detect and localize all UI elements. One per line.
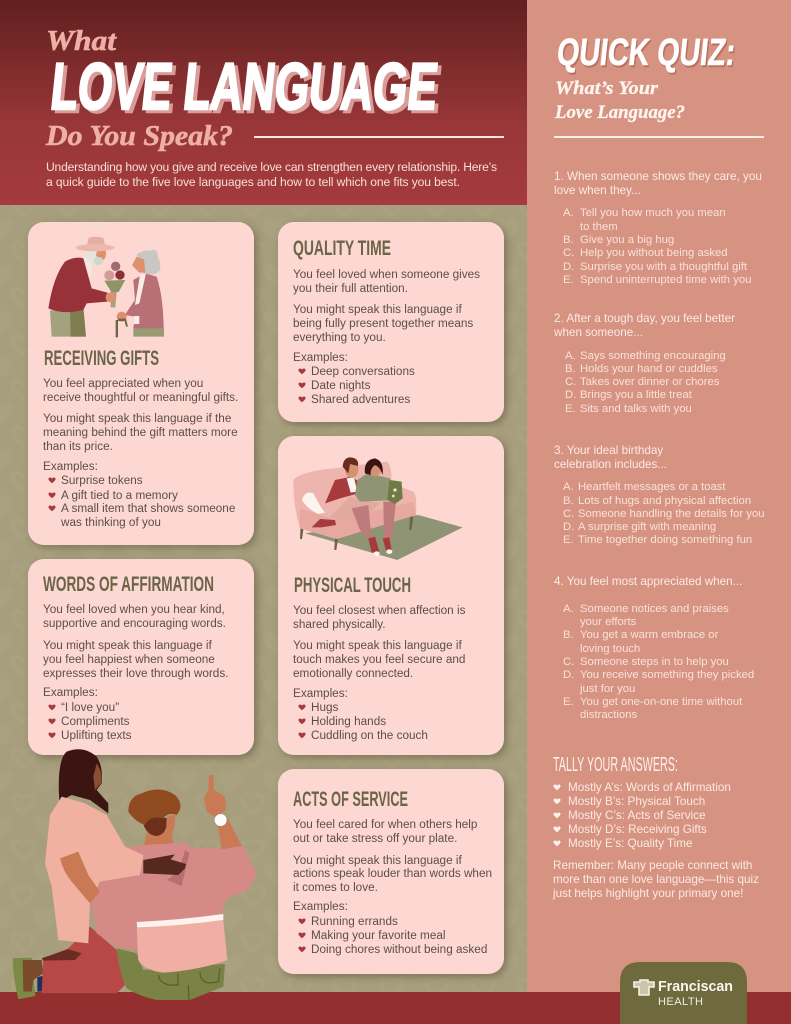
heading: words of affirmation: WORDS OF AFFIRMATION bbox=[43, 573, 214, 596]
question 3: Lots of hugs and physical affection bbox=[578, 495, 751, 507]
question 3 bbox=[554, 444, 765, 546]
question 2: C. bbox=[565, 376, 576, 388]
question 4: loving touch bbox=[580, 643, 640, 655]
text: receiving gifts: than its price. bbox=[43, 440, 113, 453]
question 1: Surprise you with a thoughtful gift bbox=[580, 261, 748, 273]
icon: elderly couple with flowers bbox=[48, 237, 164, 337]
text: physical touch: touch makes you feel secure and bbox=[293, 653, 465, 666]
title: Do You Speak: Do You Speak? bbox=[45, 120, 233, 152]
question 2 bbox=[553, 312, 735, 415]
title: Love Language: LOVE LANGUAGE bbox=[51, 53, 445, 127]
question 3: 3. Your ideal birthday bbox=[554, 444, 663, 457]
question 4: You receive something they picked bbox=[580, 669, 754, 681]
question 3: D. bbox=[563, 521, 574, 533]
text: receiving gifts: meaning behind the gift matters more bbox=[43, 426, 238, 439]
text: acts of service: actions speak louder than words when bbox=[293, 867, 492, 880]
text: acts of service: it comes to love. bbox=[293, 881, 378, 894]
remember note: just helps highlight your primary one! bbox=[552, 887, 743, 900]
footer bar bbox=[0, 992, 791, 1024]
question 3: A. bbox=[563, 481, 574, 493]
question 3: Time together doing something fun bbox=[578, 534, 752, 546]
quiz subheading: Love Language? bbox=[554, 102, 685, 123]
question 4 bbox=[554, 575, 754, 721]
question 2: E. bbox=[565, 403, 576, 415]
text: receiving gifts: Surprise tokens bbox=[61, 474, 143, 487]
text: physical touch: shared physically. bbox=[293, 618, 386, 631]
heading: acts of service: ACTS OF SERVICE bbox=[293, 788, 408, 811]
text: words of affirmation: “I love you” bbox=[61, 701, 119, 714]
logo: Franciscan Health: HEALTH bbox=[658, 996, 703, 1008]
panel: quiz sidebar bbox=[527, 0, 791, 1024]
text: acts of service bbox=[293, 818, 492, 956]
question 2: A. bbox=[565, 350, 576, 362]
question 1: Give you a big hug bbox=[580, 234, 674, 246]
text: acts of service: out or take stress off your plate. bbox=[293, 832, 457, 845]
intro text: Understanding how you give and receive love can strengthen every relationship. Here’s bbox=[46, 160, 497, 174]
question 1: Tell you how much you mean bbox=[580, 207, 726, 219]
question 4: A. bbox=[563, 603, 574, 615]
remember note bbox=[552, 859, 759, 900]
question 3: Someone handling the details for you bbox=[578, 508, 765, 520]
remember note: Remember: Many people connect with bbox=[553, 859, 752, 872]
question 2: B. bbox=[565, 363, 576, 375]
question 1: C. bbox=[563, 247, 574, 259]
panel: words of affirmation bbox=[28, 559, 254, 755]
question 2: Takes over dinner or chores bbox=[580, 376, 720, 388]
text: physical touch: Examples: bbox=[293, 687, 348, 700]
text: quality time: You might speak this language if bbox=[293, 303, 462, 316]
text: receiving gifts: was thinking of you bbox=[60, 516, 161, 529]
question 4: Someone steps in to help you bbox=[580, 656, 729, 668]
text: acts of service: Making your favorite meal bbox=[311, 929, 446, 942]
logo: Franciscan Health bbox=[620, 962, 747, 1024]
panel: acts of service bbox=[278, 769, 504, 974]
illustration: couple seen from behind bbox=[13, 749, 257, 1000]
text: quality time: everything to you. bbox=[293, 331, 386, 344]
question 1: Spend uninterrupted time with you bbox=[580, 274, 751, 286]
text: acts of service: Doing chores without being asked bbox=[311, 943, 487, 956]
text: receiving gifts: A gift tied to a memory bbox=[61, 489, 178, 502]
title: Love Language: LOVE LANGUAGE bbox=[47, 50, 441, 124]
icon: couple on sofa bbox=[293, 457, 463, 560]
patterned background bbox=[0, 205, 527, 992]
text: acts of service: You might speak this language if bbox=[293, 854, 462, 867]
text: words of affirmation: you feel happiest when someone bbox=[43, 653, 215, 666]
question 3: B. bbox=[563, 495, 574, 507]
text: words of affirmation: Compliments bbox=[61, 715, 130, 728]
question 2: when someone... bbox=[553, 326, 643, 339]
intro text bbox=[46, 160, 497, 189]
text: acts of service: Running errands bbox=[311, 915, 398, 928]
text: acts of service: You feel cared for when others help bbox=[293, 818, 478, 831]
question 4: E. bbox=[563, 696, 574, 708]
intro text: a quick guide to the five love languages and how to tell which one fits you best. bbox=[46, 175, 460, 189]
text: receiving gifts: receive thoughtful or meaningful gifts. bbox=[43, 391, 238, 404]
text: quality time: Examples: bbox=[293, 351, 348, 364]
question 2: D. bbox=[565, 389, 576, 401]
question 4: D. bbox=[563, 669, 574, 681]
question 1: Help you without being asked bbox=[580, 247, 728, 259]
tally heading: TALLY YOUR ANSWERS: bbox=[553, 754, 678, 776]
tally list: Mostly B’s: Physical Touch bbox=[568, 795, 705, 808]
question 3: A surprise gift with meaning bbox=[578, 521, 716, 533]
text: receiving gifts: You feel appreciated when you bbox=[43, 377, 203, 390]
tally list: Mostly D’s: Receiving Gifts bbox=[568, 823, 707, 836]
question 2: Sits and talks with you bbox=[580, 403, 692, 415]
question 4: Someone notices and praises bbox=[580, 603, 729, 615]
heading: receiving gifts: RECEIVING GIFTS bbox=[44, 347, 159, 370]
text: words of affirmation: supportive and encouraging words. bbox=[43, 617, 226, 630]
text: words of affirmation: expresses their love through words. bbox=[43, 667, 228, 680]
question 2: Holds your hand or cuddles bbox=[580, 363, 718, 375]
panel: physical touch bbox=[278, 436, 504, 755]
question 4: just for you bbox=[579, 683, 635, 695]
text: quality time: being fully present together means bbox=[293, 317, 473, 330]
tally list bbox=[553, 781, 731, 850]
text: words of affirmation: You feel loved when you hear kind, bbox=[43, 603, 225, 616]
text: quality time: you their full attention. bbox=[293, 282, 408, 295]
question 4: distractions bbox=[580, 709, 637, 721]
question 4: You get one-on-one time without bbox=[580, 696, 743, 708]
question 1: A. bbox=[563, 207, 574, 219]
quiz subheading bbox=[554, 78, 685, 123]
title: What: What bbox=[46, 25, 117, 57]
question 1: B. bbox=[563, 234, 574, 246]
text: receiving gifts bbox=[43, 377, 238, 529]
question 3: Heartfelt messages or a toast bbox=[578, 481, 726, 493]
question 1: love when they... bbox=[554, 184, 641, 197]
question 1: D. bbox=[563, 261, 574, 273]
quiz heading: QUICK QUIZ: bbox=[556, 34, 739, 76]
text: physical touch: Cuddling on the couch bbox=[311, 729, 428, 742]
question 2: Brings you a little treat bbox=[580, 389, 693, 401]
text: quality time: Date nights bbox=[311, 379, 371, 392]
question 3: celebration includes... bbox=[554, 458, 667, 471]
question 4: C. bbox=[563, 656, 574, 668]
text: words of affirmation: Uplifting texts bbox=[61, 729, 132, 742]
question 4: your efforts bbox=[580, 616, 637, 628]
tally list: Mostly A’s: Words of Affirmation bbox=[568, 781, 731, 794]
text: physical touch: Holding hands bbox=[311, 715, 386, 728]
text: physical touch: emotionally connected. bbox=[293, 667, 413, 680]
panel: receiving gifts bbox=[28, 222, 254, 545]
question 4: B. bbox=[563, 629, 574, 641]
tally list: Mostly E’s: Quality Time bbox=[568, 837, 692, 850]
text: words of affirmation: Examples: bbox=[43, 686, 98, 699]
logo: Franciscan Health: Franciscan bbox=[658, 978, 733, 995]
text: receiving gifts: Examples: bbox=[43, 460, 98, 473]
icon: franciscan cross bbox=[634, 980, 654, 995]
text: physical touch bbox=[293, 604, 466, 742]
text: quality time bbox=[293, 268, 480, 406]
question 2: 2. After a tough day, you feel better bbox=[554, 312, 735, 325]
question 1: to them bbox=[580, 221, 618, 233]
question 4: 4. You feel most appreciated when... bbox=[554, 575, 742, 588]
heading: quality time: QUALITY TIME bbox=[293, 237, 391, 260]
question 1: 1. When someone shows they care, you bbox=[554, 170, 762, 183]
text: quality time: You feel loved when someone gives bbox=[293, 268, 480, 281]
title: Love Language bbox=[47, 50, 445, 127]
question 3: E. bbox=[563, 534, 574, 546]
remember note: more than one love language—this quiz bbox=[553, 873, 759, 886]
tally list: Mostly C’s: Acts of Service bbox=[568, 809, 705, 822]
panel: quality time bbox=[278, 222, 504, 422]
question 2: Says something encouraging bbox=[580, 350, 726, 362]
text: words of affirmation bbox=[43, 603, 228, 742]
question 1 bbox=[554, 170, 762, 286]
heading: physical touch: PHYSICAL TOUCH bbox=[294, 574, 411, 597]
header banner bbox=[0, 0, 527, 205]
question 1: E. bbox=[563, 274, 574, 286]
text: quality time: Shared adventures bbox=[311, 393, 410, 406]
quiz heading: QUICK QUIZ: bbox=[555, 32, 737, 74]
text: physical touch: Hugs bbox=[311, 701, 339, 714]
question 4: You get a warm embrace or bbox=[580, 629, 719, 641]
text: quality time: Deep conversations bbox=[311, 365, 415, 378]
text: receiving gifts: A small item that shows someone bbox=[61, 502, 236, 515]
text: physical touch: You feel closest when affection is bbox=[293, 604, 466, 617]
text: physical touch: You might speak this language if bbox=[293, 639, 462, 652]
text: acts of service: Examples: bbox=[293, 900, 348, 913]
text: receiving gifts: You might speak this language if the bbox=[43, 412, 232, 425]
question 3: C. bbox=[563, 508, 574, 520]
text: words of affirmation: You might speak this language if bbox=[43, 639, 212, 652]
quiz subheading: What’s Your bbox=[555, 78, 659, 99]
